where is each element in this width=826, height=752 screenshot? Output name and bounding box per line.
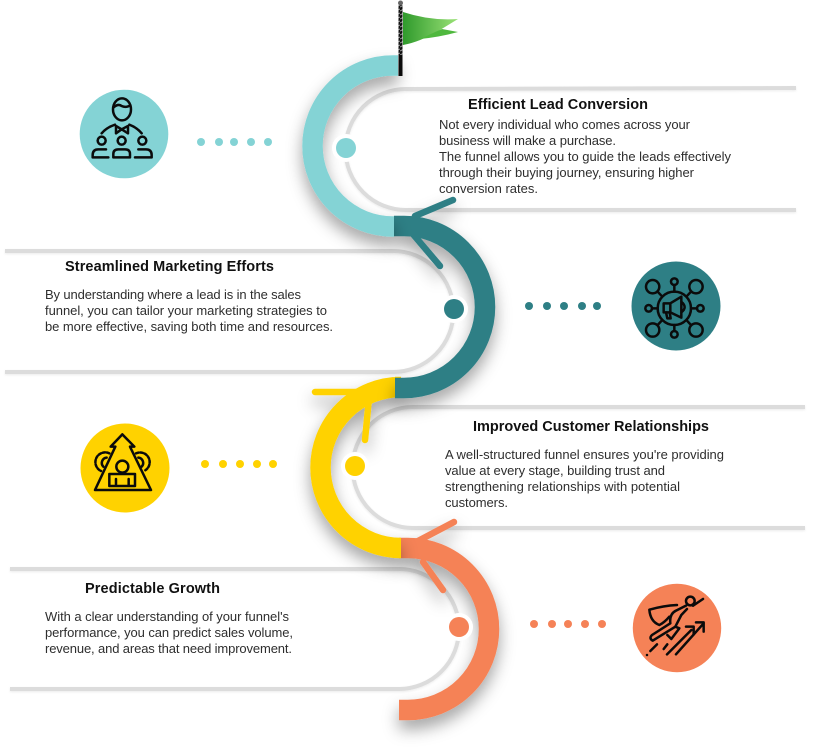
- panel: Efficient Lead Conversion text: [439, 97, 732, 196]
- heading: Streamlined Marketing Efforts: [65, 259, 274, 275]
- body text: conversion rates.: [439, 181, 538, 196]
- body text: value at every stage, building trust and: [445, 463, 665, 478]
- flag: [398, 0, 458, 76]
- body text: [445, 447, 724, 510]
- body text: The funnel allows you to guide the leads effectively: [439, 149, 732, 164]
- body text: funnel, you can tailor your marketing strategies to: [45, 303, 327, 318]
- icon: flying hero with arrows: [633, 584, 721, 672]
- body text: through their buying journey, ensuring higher: [439, 165, 695, 180]
- arc: dark teal segment: [394, 200, 485, 388]
- panel: Streamlined Marketing Efforts text: [45, 259, 333, 334]
- heading: Efficient Lead Conversion: [468, 97, 648, 113]
- heading: Predictable Growth: [85, 581, 220, 597]
- body text: [45, 609, 293, 656]
- body text: be more effective, saving both time and resources.: [45, 319, 333, 334]
- body text: performance, you can predict sales volume,: [45, 625, 293, 640]
- marker: orange dot: [445, 613, 473, 641]
- body text: With a clear understanding of your funnel's: [45, 609, 290, 624]
- body text: [439, 117, 732, 196]
- dotted connector: row 1: [197, 138, 272, 146]
- guide line: panel 2 outline: [5, 251, 453, 372]
- dotted connector: row 4: [530, 620, 606, 628]
- arc: light teal segment: [312, 66, 398, 226]
- body text: [45, 287, 333, 334]
- arc: orange segment: [399, 522, 489, 710]
- marker: dark teal dot: [440, 295, 468, 323]
- dotted connector: row 3: [201, 460, 277, 468]
- arc: yellow segment: [315, 387, 401, 548]
- body text: A well-structured funnel ensures you're providing: [445, 447, 724, 462]
- icon: megaphone network: [632, 262, 720, 350]
- panel: Predictable Growth text: [45, 581, 293, 656]
- heading: Improved Customer Relationships: [473, 419, 709, 435]
- panel: Improved Customer Relationships text: [445, 419, 724, 510]
- body text: business will make a purchase.: [439, 133, 616, 148]
- marker: light teal dot: [332, 134, 360, 162]
- icon: manager with team: [80, 90, 168, 178]
- body text: strengthening relationships with potential: [445, 479, 680, 494]
- body text: By understanding where a lead is in the sales: [45, 287, 302, 302]
- icon: person in arrow triangle with gears: [80, 424, 170, 512]
- marker: yellow dot: [341, 452, 369, 480]
- guide line: panel 1 outline: [345, 88, 796, 210]
- guide line: panel 3 outline: [353, 407, 805, 528]
- dotted connector: row 2: [525, 302, 601, 310]
- body text: Not every individual who comes across your: [439, 117, 691, 132]
- body text: revenue, and areas that need improvement.: [45, 641, 292, 656]
- body text: customers.: [445, 495, 508, 510]
- guide line: panel 4 outline: [10, 569, 459, 689]
